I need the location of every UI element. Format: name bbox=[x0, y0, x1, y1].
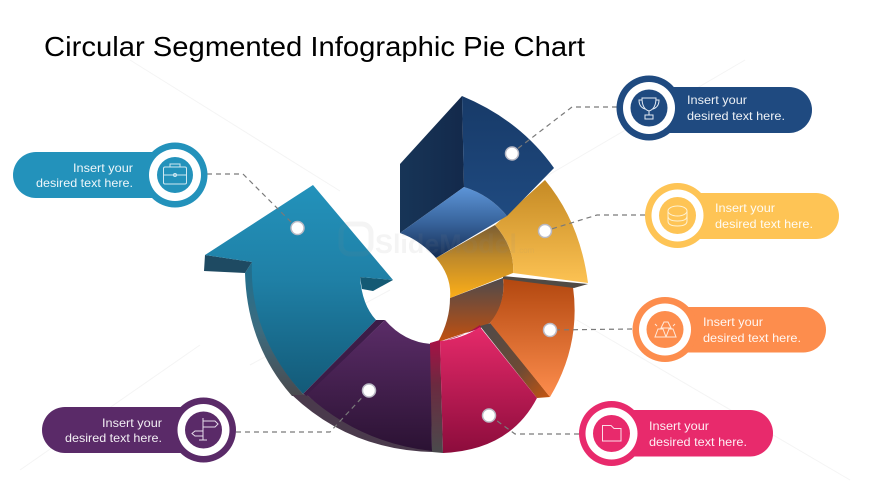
callout: teal briefcase: Insert your bbox=[73, 161, 133, 175]
connector: pink bbox=[489, 415, 579, 434]
callout: purple signpost: desired text here. bbox=[65, 431, 162, 445]
icon: gold bars bbox=[655, 322, 676, 337]
pie chart bbox=[204, 96, 588, 453]
callout: navy trophy: desired text here. bbox=[687, 109, 785, 123]
callout: orange gold bars: Insert your bbox=[703, 315, 763, 329]
watermark bbox=[341, 224, 535, 259]
segment: purple bbox=[292, 320, 432, 452]
connector: purple bbox=[236, 390, 369, 432]
callout: yellow coins: Insert your bbox=[715, 201, 775, 215]
connector: navy bbox=[512, 107, 617, 153]
callout: orange gold bars: desired text here. bbox=[703, 331, 801, 345]
segment: yellow bbox=[436, 180, 588, 298]
callout: purple signpost bbox=[42, 398, 236, 462]
callout: pink folder bbox=[579, 401, 773, 466]
connector: yellow bbox=[545, 215, 645, 231]
callout: pink folder: desired text here. bbox=[649, 435, 747, 449]
callout: pink folder: Insert your bbox=[649, 419, 709, 433]
callout: navy trophy: Insert your bbox=[687, 93, 747, 107]
segment: orange bbox=[480, 278, 575, 398]
title: Circular Segmented Infographic Pie Chart bbox=[44, 31, 585, 62]
segment: pink bbox=[430, 325, 537, 453]
icon: folder bbox=[602, 426, 621, 441]
icon: coins bbox=[668, 206, 687, 226]
icon: signpost bbox=[192, 418, 218, 440]
watermark: .com bbox=[517, 246, 535, 255]
callout: teal briefcase bbox=[13, 142, 208, 208]
callout: purple signpost: Insert your bbox=[102, 416, 162, 430]
connector: orange bbox=[550, 329, 632, 330]
callout: yellow coins bbox=[645, 183, 839, 248]
icon: briefcase bbox=[164, 164, 186, 184]
callout: yellow coins: desired text here. bbox=[715, 217, 813, 231]
callout: navy trophy bbox=[616, 76, 812, 140]
segment: navy bbox=[400, 96, 554, 258]
connector: teal bbox=[207, 174, 297, 228]
segment: orange inner wall bbox=[438, 278, 503, 342]
segment: teal arrow bbox=[204, 185, 393, 396]
watermark: SlideModel bbox=[375, 229, 517, 259]
marker dots bbox=[291, 147, 556, 422]
callout: teal briefcase: desired text here. bbox=[36, 176, 133, 190]
callout: orange gold bars bbox=[632, 297, 826, 362]
icon: trophy bbox=[639, 98, 659, 119]
